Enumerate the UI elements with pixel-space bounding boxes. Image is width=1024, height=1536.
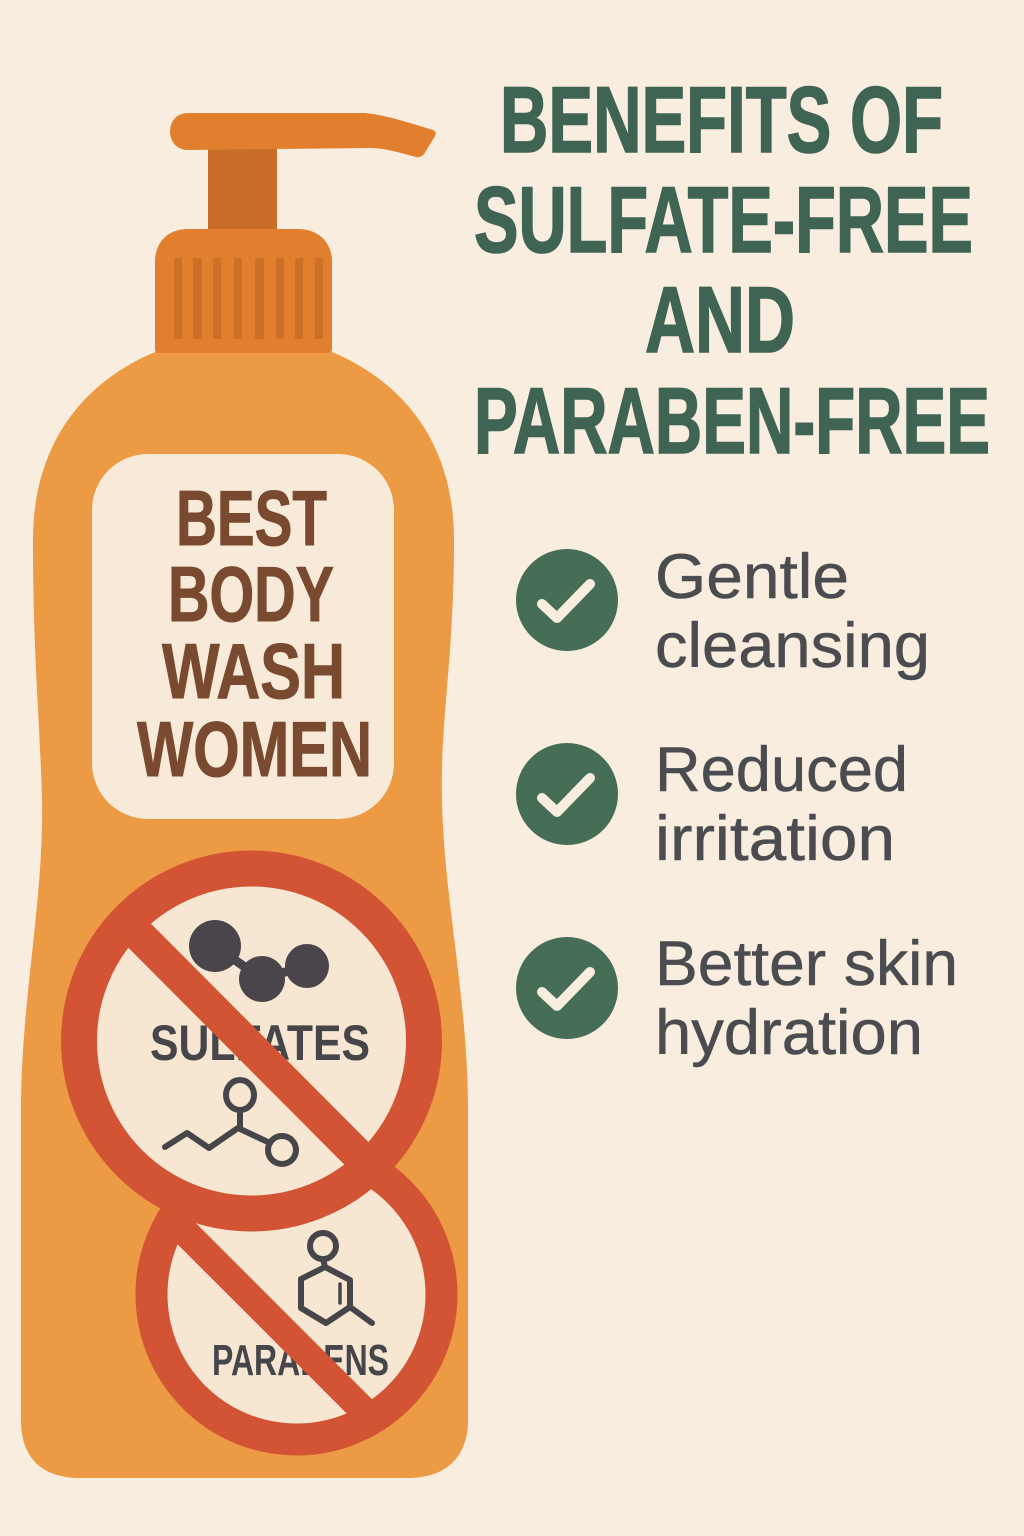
parabens text: PARABENS [212,1336,389,1385]
no sulfates symbol [79,868,424,1214]
pump nozzle [170,113,436,157]
bottle body [21,352,468,1478]
benefit: gentle cleansing [516,542,930,681]
ester molecule icon [165,1080,296,1164]
red ring and slash [152,1150,442,1440]
product label [92,454,394,819]
benefit text: Reduced [655,735,908,805]
cap ridges [174,258,323,339]
label text [137,474,372,793]
benefit: reduced irritation [516,735,908,874]
benefit text: Gentle [655,542,849,612]
sulfate molecule icon [189,920,329,1002]
benefit text: cleansing [655,611,930,681]
paraben molecule icon [301,1233,372,1323]
benefit: better skin hydration [516,929,958,1068]
sulfates text: SULFATES [150,1015,370,1071]
title: AND [645,267,795,372]
title [474,67,990,473]
benefit text [655,735,908,874]
label text: BODY [168,550,334,638]
icon: check mark [516,937,618,1039]
benefit text: irritation [655,804,895,874]
icon: check mark [516,743,618,845]
benefit text [655,929,958,1068]
label text: WOMEN [137,705,372,793]
benefit text: hydration [655,998,923,1068]
pump bottle [21,113,468,1478]
benefit text: Better skin [655,929,958,999]
label text: BEST [176,474,327,562]
no parabens symbol [152,1150,442,1440]
red ring and slash [79,868,424,1214]
pump stem [208,148,277,232]
label text: WASH [162,627,345,715]
bottle cap [155,229,332,353]
icon: check mark [516,549,618,651]
benefit text [655,542,930,681]
